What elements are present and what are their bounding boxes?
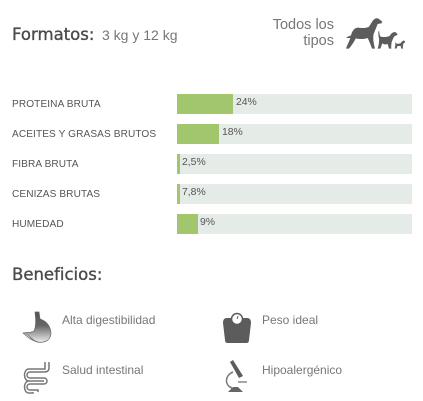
text: hipoalergenico: Hipoalergénico — [262, 363, 342, 377]
text: todos los tipos: tipos — [303, 33, 334, 49]
text: alta digestibilidad: Alta digestibilidad — [62, 313, 155, 327]
bar: cenizas brutas 7,8%: 7,8% — [182, 187, 206, 198]
row: fibra bruta: FIBRA BRUTA — [12, 159, 79, 170]
bar: proteina bruta 24% — [177, 94, 412, 114]
row: cenizas brutas: CENIZAS BRUTAS — [12, 189, 100, 200]
text: todos los tipos — [273, 17, 334, 49]
bar: humedad 9%: 9% — [200, 217, 215, 228]
row: aceites y grasas brutos: ACEITES Y GRASAS BRUTOS — [12, 129, 156, 140]
bar: fibra bruta 2,5%: 2,5% — [182, 157, 206, 168]
bar: cenizas brutas 7,8% — [177, 184, 412, 204]
heading: formatos: Formatos: — [12, 25, 94, 44]
bar: humedad 9% — [177, 214, 412, 234]
bar: aceites y grasas 18% — [177, 124, 412, 144]
bar: fibra bruta 2,5% — [177, 154, 412, 174]
bar: proteina bruta 24%: 24% — [236, 97, 257, 108]
text: package sizes: 3 kg y 12 kg — [102, 27, 178, 43]
row: proteina bruta: PROTEINA BRUTA — [12, 99, 101, 110]
text: todos los tipos: Todos los — [273, 17, 334, 33]
bar: aceites y grasas 18%: 18% — [222, 127, 243, 138]
text: salud intestinal: Salud intestinal — [62, 363, 143, 377]
row: humedad: HUMEDAD — [12, 219, 64, 230]
text: peso ideal: Peso ideal — [262, 313, 318, 327]
heading: beneficios: Beneficios: — [12, 265, 102, 284]
